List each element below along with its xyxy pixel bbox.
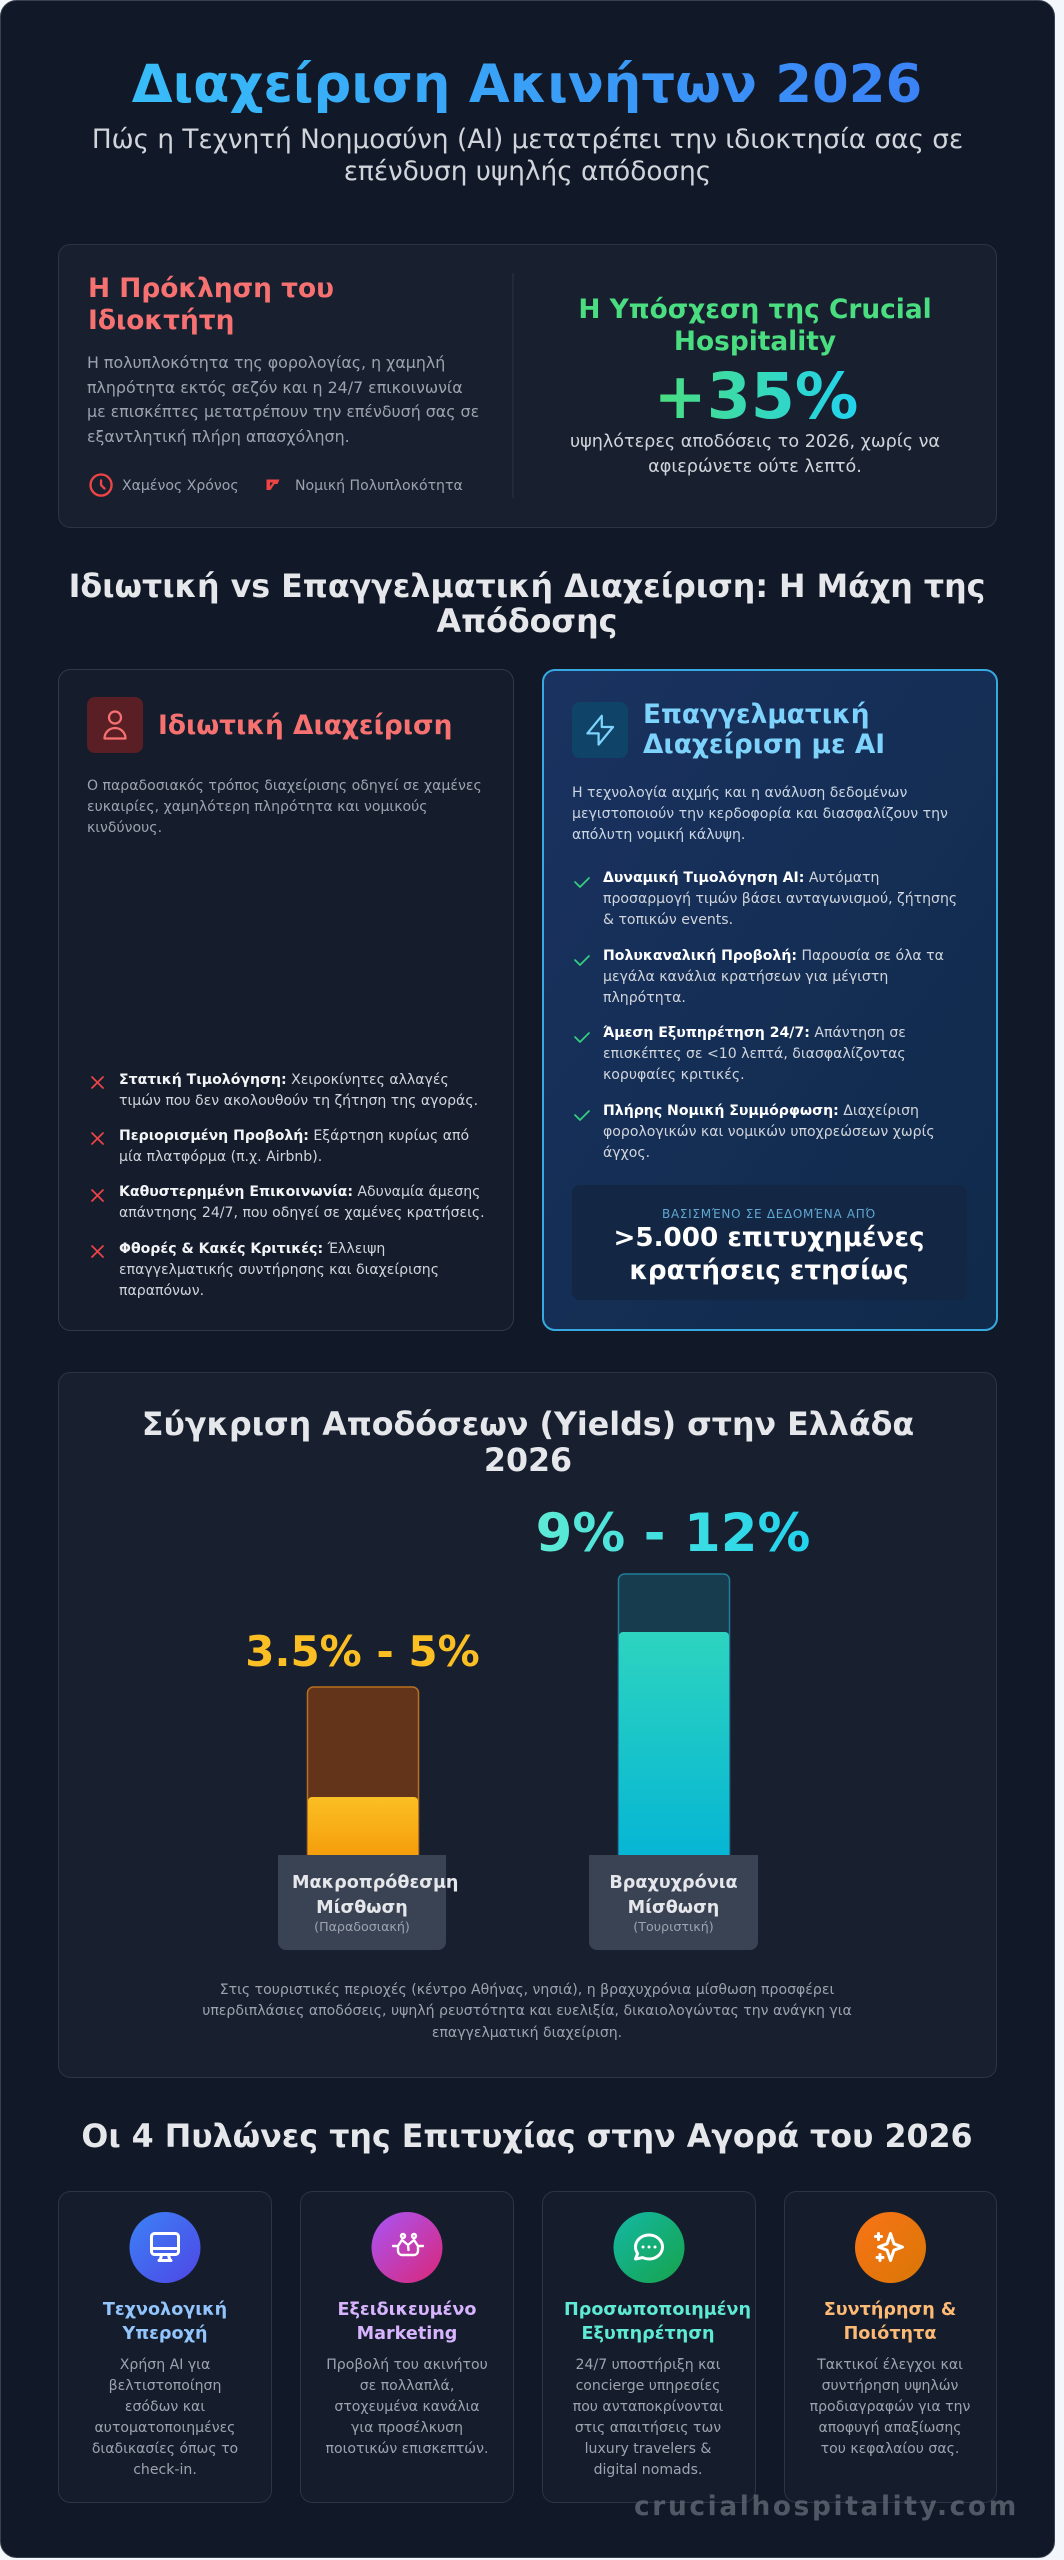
maintenance text: αποφυγή απαξίωσης <box>818 2420 962 2436</box>
promise text: αφιερώνετε ούτε λεπτό. <box>648 457 862 477</box>
challenge text <box>87 353 479 446</box>
list: AI benefits: Άμεση Εξυπηρέτηση 24/7: Απάντηση σε <box>603 1025 906 1041</box>
tag: lost time: Χαμένος Χρόνος <box>122 478 239 494</box>
panel: yields comparison <box>58 1372 996 2078</box>
service text <box>573 2357 724 2478</box>
maintenance text: συντήρηση υψηλών <box>822 2378 959 2394</box>
promise heading: Hospitality <box>674 326 836 357</box>
promise heading <box>578 294 932 357</box>
service text: luxury travelers & <box>585 2441 711 2457</box>
list: AI benefits: Δυναμική Τιμολόγηση AI: Αυτόματη <box>603 870 879 886</box>
watermark: crucialhospitality.com <box>634 2491 1019 2522</box>
bar: short-term rental: 9% - 12% <box>536 1503 810 1564</box>
challenge text: Η πολυπλοκότητα της φορολογίας, η χαμηλή <box>87 353 445 372</box>
maintenance text: Τακτικοί έλεγχοι και <box>816 2357 963 2373</box>
list: AI benefits: κορυφαίες κριτικές. <box>603 1067 745 1083</box>
chart heading <box>142 1407 914 1479</box>
AI heading <box>643 699 885 760</box>
subtitle <box>92 125 963 187</box>
service text: στις απαιτήσεις των <box>575 2420 721 2436</box>
marketing heading: Marketing <box>357 2324 457 2344</box>
callout: bookings stat: κρατήσεις ετησίως <box>629 1256 909 1286</box>
marketing text: ποιοτικών επισκεπτών. <box>326 2441 488 2457</box>
list: private drawbacks <box>92 1072 485 1299</box>
AI description: απόλυτη νομική κάλυψη. <box>572 827 745 843</box>
marketing text: στοχευμένα κανάλια <box>334 2399 480 2415</box>
chart caption <box>202 1982 852 2041</box>
icon: legal <box>266 480 280 490</box>
maintenance text: προδιαγραφών για την <box>810 2399 971 2415</box>
technology text: check-in. <box>133 2462 197 2478</box>
tag: legal complexity: Νομική Πολυπλοκότητα <box>295 478 463 494</box>
technology text: εσόδων και <box>125 2399 205 2415</box>
icon: bolt <box>572 702 628 758</box>
bar: long-term rental: (Παραδοσιακή) <box>314 1919 410 1934</box>
section heading: comparison <box>69 569 985 640</box>
maintenance heading: Συντήρηση & <box>824 2300 956 2320</box>
private description: ευκαιρίες, χαμηλότερη πληρότητα και νομικούς <box>87 799 428 815</box>
bar: long-term rental: Μακροπρόθεσμη <box>292 1873 458 1893</box>
marketing text: Προβολή του ακινήτου <box>326 2357 488 2373</box>
marketing heading <box>338 2300 476 2344</box>
list: AI benefits: επισκέπτες σε <10 λεπτά, διασφαλίζοντας <box>603 1046 906 1062</box>
AI description: Η τεχνολογία αιχμής και η ανάλυση δεδομένων <box>572 785 907 801</box>
callout: bookings stat <box>572 1185 967 1300</box>
list: private drawbacks: τιμών που δεν ακολουθούν τη ζήτηση της αγοράς. <box>119 1093 478 1109</box>
challenge text: με επισκέπτες μετατρέπουν την επένδυσή σας σε <box>87 402 479 421</box>
challenge text: εξαντλητική πλήρη απασχόληση. <box>87 427 350 446</box>
technology text: διαδικασίες όπως το <box>92 2441 238 2457</box>
title: Διαχείριση Ακινήτων 2026 <box>132 54 922 115</box>
maintenance text <box>810 2357 971 2457</box>
technology heading: Τεχνολογική <box>103 2300 227 2320</box>
panel: challenge and promise <box>58 244 996 528</box>
service text: που ανταποκρίνονται <box>573 2399 724 2415</box>
chart heading: Σύγκριση Αποδόσεων (Yields) στην Ελλάδα <box>142 1407 914 1443</box>
list: AI benefits: & τοπικών events. <box>603 912 733 928</box>
AI description <box>572 785 948 843</box>
section heading: comparison: Ιδιωτική vs Επαγγελματική Διαχείριση: Η Μάχη της <box>69 569 985 605</box>
private description: Ο παραδοσιακός τρόπος διαχείρισης οδηγεί σε χαμένες <box>87 778 482 794</box>
private description: κινδύνους. <box>87 820 162 836</box>
list: private drawbacks: Καθυστερημένη Επικοινωνία: Αδυναμία άμεσης <box>119 1184 480 1200</box>
service heading <box>564 2300 751 2344</box>
bar: short-term rental <box>536 1503 810 1950</box>
chart caption: Στις τουριστικές περιοχές (κέντρο Αθήνας, νησιά), η βραχυχρόνια μίσθωση προσφέρει <box>220 1982 834 1998</box>
list: AI benefits <box>575 870 957 1161</box>
list: AI benefits: άγχος. <box>603 1145 650 1161</box>
service heading: Προσωποποιημένη <box>564 2300 751 2320</box>
stat: +35%: +35% <box>654 359 858 433</box>
bar: short-term rental: (Τουριστική) <box>633 1919 714 1934</box>
marketing text <box>326 2357 488 2457</box>
technology text: Χρήση AI για <box>120 2357 210 2373</box>
technology text: βελτιστοποίηση <box>109 2378 221 2394</box>
private description <box>87 778 482 836</box>
technology heading <box>103 2300 227 2344</box>
subtitle: Πώς η Τεχνητή Νοημοσύνη (AI) μετατρέπει την ιδιοκτησία σας σε <box>92 125 963 155</box>
list: private drawbacks: απάντησης 24/7, που οδηγεί σε χαμένες κρατήσεις. <box>119 1205 485 1221</box>
list: private drawbacks: Φθορές & Κακές Κριτικές: Έλλειψη <box>119 1241 385 1257</box>
bar: long-term rental <box>245 1627 480 1950</box>
list: AI benefits: Πολυκαναλική Προβολή: Παρουσία σε όλα τα <box>603 948 944 964</box>
bar: long-term rental: 3.5% - 5% <box>245 1627 480 1676</box>
challenge text: πληρότητα εκτός σεζόν και η 24/7 επικοινωνία <box>87 378 463 397</box>
challenge heading: Η Πρόκληση του <box>88 273 334 304</box>
chart heading: 2026 <box>484 1443 572 1479</box>
panel: private management <box>58 670 514 1330</box>
subtitle: επένδυση υψηλής απόδοσης <box>344 157 711 187</box>
technology text: αυτοματοποιημένες <box>95 2420 235 2436</box>
section heading: comparison: Απόδοσης <box>437 604 617 640</box>
marketing text: για προσέλκυση <box>351 2420 463 2436</box>
promise text: υψηλότερες αποδόσεις το 2026, χωρίς να <box>570 432 940 452</box>
promise text <box>570 432 940 477</box>
icon: clock <box>91 475 112 496</box>
maintenance heading <box>824 2300 956 2344</box>
marketing heading: Εξειδικευμένο <box>338 2300 476 2320</box>
promise heading: Η Υπόσχεση της Crucial <box>578 294 932 325</box>
AI description: μεγιστοποιούν την κερδοφορία και διασφαλίζουν την <box>572 806 948 822</box>
icon: person <box>87 697 143 753</box>
bar chart <box>245 1503 810 1950</box>
service heading: Εξυπηρέτηση <box>581 2324 715 2344</box>
bar: long-term rental: Μίσθωση <box>316 1898 408 1918</box>
list: AI benefits: προσαρμογή τιμών βάσει ανταγωνισμού, ζήτησης <box>603 891 957 907</box>
service text: digital nomads. <box>594 2462 702 2478</box>
maintenance text: του κεφαλαίου σας. <box>821 2441 959 2457</box>
chart caption: υπερδιπλάσιες αποδόσεις, υψηλή ρευστότητα και ευελιξία, δικαιολογώντας την ανάγκη για <box>202 2003 852 2019</box>
list: private drawbacks: μία πλατφόρμα (π.χ. Airbnb). <box>119 1149 322 1165</box>
list: AI benefits: πληρότητα. <box>603 990 686 1006</box>
service text: 24/7 υποστήριξη και <box>576 2357 721 2373</box>
list: AI benefits: Πλήρης Νομική Συμμόρφωση: Διαχείριση <box>603 1103 919 1119</box>
callout: bookings stat: ΒΑΣΙΣΜΈΝΟ ΣΕ ΔΕΔΟΜΈΝΑ ΑΠΌ <box>662 1207 876 1221</box>
pillar: service <box>542 2192 756 2502</box>
panel: AI management <box>543 670 997 1330</box>
list: private drawbacks: Στατική Τιμολόγηση: Χειροκίνητες αλλαγές <box>119 1072 449 1088</box>
icon: computer <box>130 2212 200 2283</box>
chart caption: επαγγελματική διαχείριση. <box>432 2025 622 2041</box>
challenge heading <box>88 273 334 336</box>
pillar: technology <box>58 2192 272 2502</box>
pillar: maintenance <box>784 2192 996 2502</box>
bar: short-term rental: Βραχυχρόνια <box>609 1873 738 1893</box>
list: private drawbacks: Περιορισμένη Προβολή: Εξάρτηση κυρίως από <box>119 1128 469 1144</box>
challenge heading: Ιδιοκτήτη <box>88 305 234 336</box>
marketing text: σε πολλαπλά, <box>360 2378 454 2394</box>
service text: concierge υπηρεσίες <box>576 2378 720 2394</box>
technology heading: Υπεροχή <box>121 2324 208 2344</box>
list: AI benefits: φορολογικών και νομικών υποχρεώσεων χωρίς <box>603 1124 935 1140</box>
bar: short-term rental: Μίσθωση <box>628 1898 719 1918</box>
icon: audience <box>372 2212 442 2283</box>
AI heading: Επαγγελματική <box>643 699 870 730</box>
list: AI benefits: μεγάλα κανάλια κρατήσεων για μέγιστη <box>603 969 888 985</box>
private heading: Ιδιωτική Διαχείριση <box>158 710 452 741</box>
AI heading: Διαχείριση με AI <box>643 729 885 760</box>
icon: chat <box>614 2212 684 2283</box>
technology text <box>92 2357 238 2478</box>
callout: bookings stat: >5.000 επιτυχημένες <box>613 1223 925 1253</box>
section heading: pillars: Οι 4 Πυλώνες της Επιτυχίας στην Αγορά του 2026 <box>81 2119 973 2155</box>
header <box>92 54 963 187</box>
list: private drawbacks: παραπόνων. <box>119 1283 204 1299</box>
pillar: marketing <box>300 2192 514 2502</box>
maintenance heading: Ποιότητα <box>844 2324 936 2344</box>
list: private drawbacks: επαγγελματικής συντήρησης και διαχείρισης <box>119 1262 439 1278</box>
icon: sparkles <box>855 2212 926 2283</box>
